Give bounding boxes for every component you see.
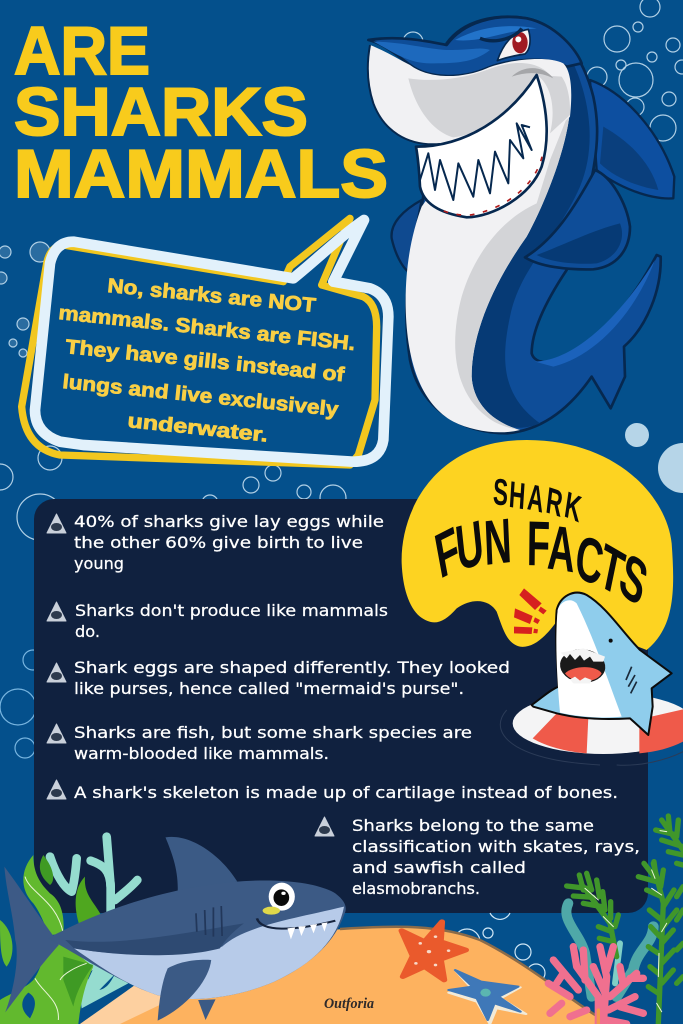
speech bubble text [57, 275, 356, 447]
icon 1 [47, 514, 66, 533]
eye [263, 883, 295, 915]
fun fact texts: elasmobranchs. [352, 879, 480, 898]
dorsal fin [590, 80, 674, 198]
eye and gills [609, 639, 637, 693]
dark body band [471, 63, 590, 428]
speech bubble [22, 218, 388, 465]
dorsal fin [165, 837, 237, 892]
yellow outline [22, 218, 377, 465]
fun fact texts: Sharks are fish, but some shark species are [74, 723, 472, 742]
white belly [406, 63, 570, 432]
smile and teeth [257, 918, 335, 939]
title: ARE [14, 13, 150, 89]
fun fact texts: Sharks belong to the same [352, 816, 594, 835]
icon 3 [47, 663, 66, 682]
fun fact texts: classification with skates, rays, [352, 837, 640, 856]
shark on swim ring [500, 593, 683, 765]
snout outline [368, 45, 440, 144]
swim ring [513, 693, 683, 754]
fun fact texts [74, 512, 640, 898]
tail [4, 867, 59, 1012]
speech bubble text: mammals. Sharks are FISH. [57, 302, 356, 355]
large grinning shark [368, 17, 674, 433]
lower teal coral [65, 948, 128, 1008]
fun fact texts: Shark eggs are shaped differently. They looked [74, 658, 510, 677]
solid pale bubbles [625, 423, 683, 493]
icon 2 [47, 602, 66, 621]
icon 5 [47, 780, 66, 799]
snout grey [408, 63, 554, 137]
teal coral [50, 837, 137, 917]
heading: fun facts: FUN FACTS [430, 506, 654, 621]
speech bubble text: underwater. [126, 410, 269, 447]
grey belly shading [455, 110, 570, 430]
fun fact texts: do. [75, 622, 100, 641]
mouth [416, 75, 547, 217]
white outline [35, 220, 388, 462]
bottom bubbles [454, 913, 545, 982]
fun fact texts: 40% of sharks give lay eggs while [74, 512, 384, 531]
water ripples [500, 710, 683, 765]
title: SHARKS [14, 74, 308, 150]
body [48, 880, 346, 999]
fun fact texts: the other 60% give birth to live [74, 533, 363, 552]
exclamation marks [514, 588, 547, 634]
panel: fun facts [34, 499, 648, 913]
icon 6 [315, 817, 334, 836]
speech bubble text: They have gills instead of [64, 336, 346, 386]
sand [80, 927, 610, 1024]
left seaweed [0, 837, 137, 1024]
teal seaweed [566, 903, 592, 997]
fun fact texts: young [74, 554, 124, 573]
icon 4 [47, 724, 66, 743]
speech bubble text: lungs and live exclusively [61, 371, 340, 421]
body and tail [406, 17, 661, 433]
gills [196, 906, 222, 937]
snout white [368, 45, 571, 144]
cartoon shark at the bottom [4, 837, 346, 1021]
right coral and kelp [548, 816, 683, 1024]
tail highlight [535, 260, 655, 367]
green kelp left [567, 873, 618, 957]
yellow fun facts blob [402, 440, 673, 650]
teeth [420, 123, 532, 200]
blue starfish [449, 970, 526, 1024]
fun fact texts: Sharks don't produce like mammals [75, 601, 388, 620]
green kelp right [638, 862, 677, 1023]
shark belly [556, 600, 622, 717]
fun fact texts: A shark's skeleton is made up of cartilage instead of bones. [74, 783, 618, 802]
dark flank [65, 923, 244, 955]
head upper [368, 17, 582, 76]
shark body [532, 593, 672, 735]
pink coral [548, 947, 643, 1024]
green kelp [23, 855, 64, 935]
left fin [392, 200, 422, 272]
heading: shark: SHARK [492, 470, 584, 531]
fun fact texts: warm-blooded like mammals. [74, 744, 329, 763]
title [14, 13, 388, 212]
fun fact texts: and sawfish called [352, 858, 526, 877]
fact icons [47, 514, 334, 836]
background bubbles [0, 0, 683, 758]
belly [74, 907, 344, 999]
pectoral fin [525, 170, 630, 269]
eye [497, 29, 530, 61]
gums [438, 157, 542, 215]
speech bubble text: No, sharks are NOT [107, 275, 317, 317]
mouth [558, 647, 607, 685]
outforia logo: Outforia [324, 996, 374, 1012]
pectoral fin [158, 960, 211, 1021]
orange starfish [402, 922, 466, 980]
fun fact texts: like purses, hence called "mermaid's purse". [74, 679, 464, 698]
title: MAMMALS [14, 136, 388, 212]
